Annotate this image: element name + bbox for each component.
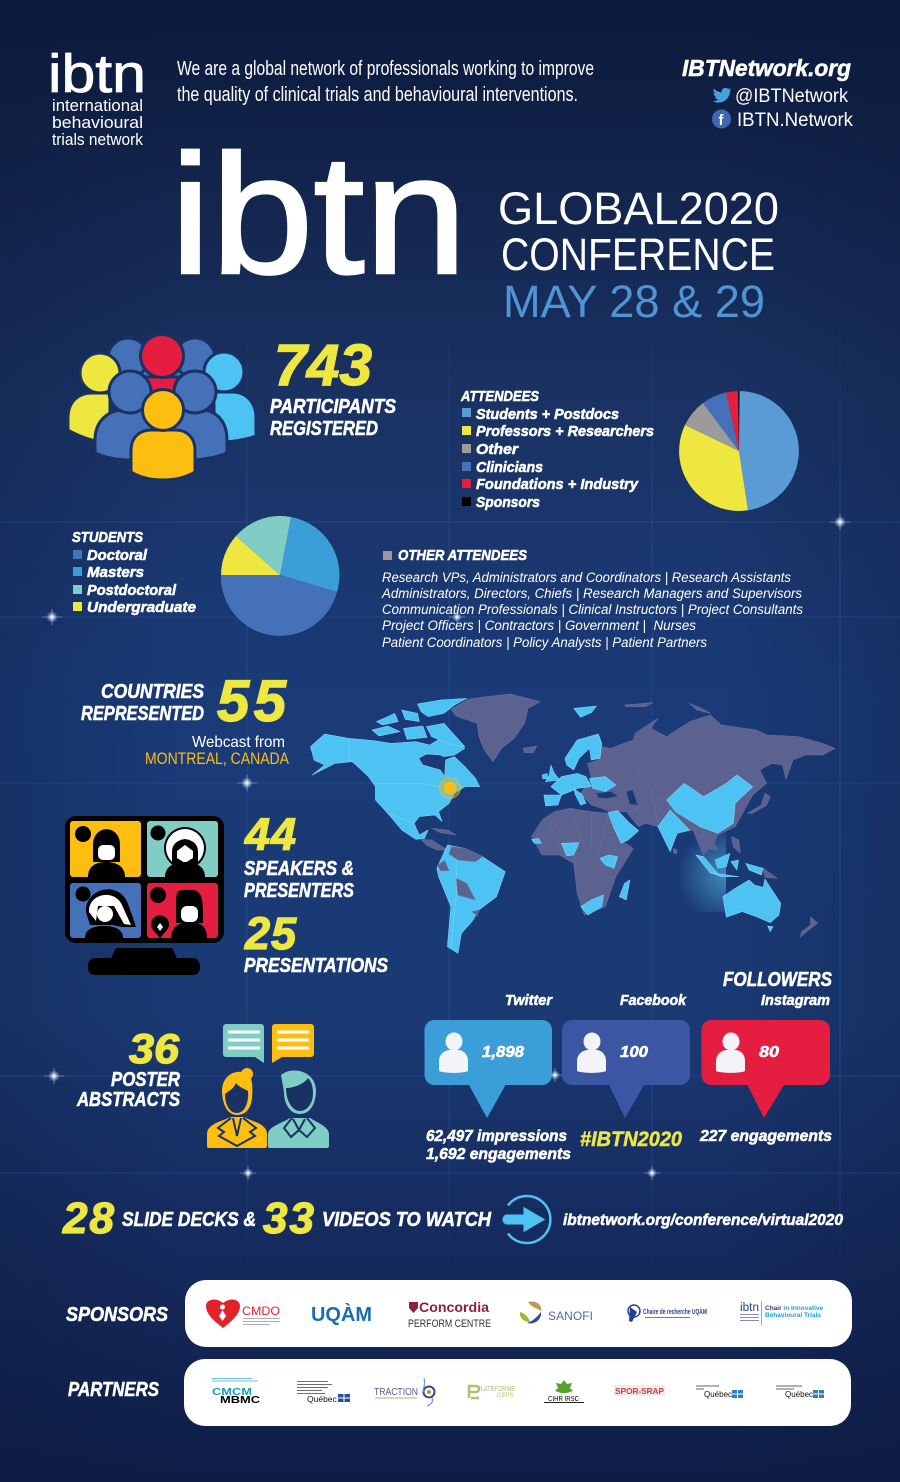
legend: attendees: Students + Postdocs <box>476 406 619 423</box>
heading: sponsors: SPONSORS <box>66 1304 169 1326</box>
legend: students: Postdoctoral <box>87 582 177 599</box>
panel: sponsors logos <box>185 1280 852 1347</box>
slide decks and videos: 28 <box>62 1194 115 1243</box>
engagement figures: #IBTN2020 <box>580 1128 682 1151</box>
slide decks and videos: VIDEOS TO WATCH <box>322 1209 492 1231</box>
large ibtn logo: ibtn <box>170 120 467 310</box>
logo: Centre integre Quebec: Québec <box>307 1394 338 1404</box>
social media followers <box>424 969 833 1163</box>
engagement figures: 227 engagements <box>699 1128 832 1145</box>
logo: Traction: TRACTION <box>374 1386 418 1398</box>
legend: attendees: ATTENDEES <box>460 388 539 405</box>
legend: students <box>72 529 196 616</box>
logo: Concordia: PERFORM CENTRE <box>408 1318 491 1330</box>
speakers and presentations stats: SPEAKERS & <box>244 858 354 880</box>
pie chart: students <box>221 516 339 636</box>
logo: CMDO <box>206 1299 280 1328</box>
slide decks and videos: 33 <box>263 1194 314 1243</box>
speakers and presentations stats: 25 <box>244 908 297 959</box>
twitter bubble: 1,898 <box>482 1044 524 1061</box>
web and social links: IBTNetwork.org <box>682 55 851 81</box>
logo: IBTN chair: ibtn <box>740 1302 759 1314</box>
legend: students: Undergraduate <box>87 599 196 616</box>
poster abstracts stat: ABSTRACTS <box>76 1089 181 1111</box>
logo: Centre integre Quebec <box>297 1382 350 1404</box>
logo: Fonds de recherche Quebec sante: Québec <box>704 1390 732 1399</box>
engagement figures <box>426 1128 832 1163</box>
speakers and presentations stats <box>244 809 389 977</box>
logo: Sanofi: SANOFI <box>548 1309 593 1323</box>
poster abstracts stat <box>76 1025 181 1111</box>
conference title: MAY 28 & 29 <box>503 276 765 327</box>
logo: CMCM MBMC: MBMC <box>220 1394 260 1406</box>
logo: Traction <box>374 1378 434 1406</box>
tagline: the quality of clinical trials and behavioural interventions. <box>177 84 578 106</box>
legend: students: Doctoral <box>87 547 148 564</box>
facebook bubble <box>562 993 690 1118</box>
logo: Chaire UQAM <box>628 1305 707 1322</box>
conference title: CONFERENCE <box>501 229 775 280</box>
facebook bubble: Facebook <box>620 993 687 1009</box>
legend: attendees: Clinicians <box>476 459 543 476</box>
logo: Chaire UQAM: Chaire de recherche UQÀM <box>643 1307 707 1316</box>
icon: speech bubbles and two people <box>207 1024 329 1148</box>
heading: partners: PARTNERS <box>68 1379 160 1401</box>
twitter bubble: Twitter <box>505 993 553 1009</box>
slide decks and videos <box>62 1194 843 1243</box>
countries stat: MONTREAL, CANADA <box>145 750 289 768</box>
panel: partners logos <box>184 1359 851 1426</box>
logo: CIHR IRSC: CIHR IRSC <box>548 1394 579 1403</box>
countries stat: REPRESENTED <box>81 703 204 725</box>
logo: Fonds de recherche Quebec societe <box>776 1386 824 1399</box>
logo: CMCM MBMC: CMCM <box>212 1386 252 1398</box>
speakers and presentations stats: PRESENTATIONS <box>244 955 389 977</box>
other attendees text block: Research VPs, Administrators and Coordinators | Research Assistants <box>382 570 791 585</box>
countries stat: 55 <box>217 669 287 734</box>
poster abstracts stat: POSTER <box>111 1069 180 1091</box>
conference title: GLOBAL2020 <box>498 183 779 234</box>
header logo: ibtn international behavioural trials network: ibtn <box>48 44 146 104</box>
countries stat <box>81 669 289 768</box>
participants stat: PARTICIPANTS <box>270 396 397 418</box>
legend: attendees: Foundations + Industry <box>476 476 639 493</box>
legend: attendees <box>460 388 654 511</box>
countries stat: Webcast from <box>192 734 285 751</box>
icon: monitor with video call <box>67 818 222 975</box>
other attendees text block <box>381 547 803 650</box>
legend: attendees: Other <box>476 441 519 458</box>
logo: Sanofi <box>520 1302 593 1323</box>
icon: group of people <box>68 334 256 480</box>
web and social links <box>682 55 853 131</box>
other attendees text block: Patient Coordinators | Policy Analysts | Patient Partners <box>382 635 707 650</box>
instagram bubble: Instagram <box>761 993 830 1009</box>
header logo: ibtn international behavioural trials network: behavioural <box>52 113 143 132</box>
header logo: ibtn international behavioural trials network <box>48 44 146 149</box>
logo: CMDO: CMDO <box>242 1306 280 1318</box>
logo: Plateforme CEPS: CEPS <box>497 1393 513 1399</box>
world map <box>311 694 835 953</box>
icon: facebook <box>712 110 731 129</box>
legend: students: STUDENTS <box>72 529 143 546</box>
header logo: ibtn international behavioural trials network: international <box>52 96 143 115</box>
tagline <box>177 58 594 106</box>
logo: CIHR IRSC <box>544 1380 584 1403</box>
web and social links: IBTN.Network <box>737 110 853 131</box>
logo: SPOR SRAP: SPOR-SRAP <box>615 1386 664 1396</box>
logo: CMCM MBMC <box>212 1378 260 1406</box>
facebook bubble: 100 <box>620 1044 648 1061</box>
legend: students: Masters <box>87 564 144 581</box>
other attendees text block: OTHER ATTENDEES <box>398 547 527 564</box>
legend: attendees: Sponsors <box>476 494 540 511</box>
participants stat: 743 <box>274 333 372 398</box>
countries stat: COUNTRIES <box>101 681 205 703</box>
engagement figures: 62,497 impressions <box>426 1128 567 1145</box>
icon: Montreal marker <box>440 778 460 798</box>
logo: IBTN chair: Chair in Innovative <box>765 1305 824 1312</box>
logo: Concordia: Concordia <box>419 1299 489 1315</box>
other attendees text block: Project Officers | Contractors | Government | Nurses <box>382 618 696 633</box>
speakers and presentations stats: 44 <box>244 809 296 860</box>
logo: UQAM: UQÀM <box>311 1303 372 1326</box>
logo: IBTN chair <box>740 1301 824 1325</box>
participants stat: REGISTERED <box>270 418 378 440</box>
web and social links: @IBTNetwork <box>735 86 848 107</box>
logo: Plateforme CEPS <box>469 1386 515 1399</box>
other attendees text block: Administrators, Directors, Chiefs | Research Managers and Supervisors <box>381 586 802 601</box>
speakers and presentations stats: PRESENTERS <box>244 880 355 902</box>
icon: twitter bird <box>713 88 732 103</box>
logo: Fonds de recherche Quebec societe: Québec <box>785 1390 813 1399</box>
engagement figures: 1,692 engagements <box>426 1146 571 1163</box>
instagram bubble <box>702 993 830 1118</box>
other attendees text block: Communication Professionals | Clinical Instructors | Project Consultants <box>382 602 803 617</box>
heading: followers: FOLLOWERS <box>723 969 833 991</box>
icon: arrow in circle <box>502 1196 550 1243</box>
logo: IBTN chair: Behavioural Trials <box>765 1312 821 1319</box>
participants stat <box>270 333 397 440</box>
instagram bubble: 80 <box>759 1044 779 1061</box>
icon: facebook: f <box>718 112 724 129</box>
tagline: We are a global network of professionals working to improve <box>177 58 594 80</box>
slide decks and videos: SLIDE DECKS & <box>122 1209 256 1231</box>
header logo: ibtn international behavioural trials network: trials network <box>52 130 143 149</box>
conference title <box>498 183 779 327</box>
logo: Plateforme CEPS: PLATEFORME <box>477 1386 515 1393</box>
poster abstracts stat: 36 <box>129 1025 180 1072</box>
logo: Fonds de recherche Quebec sante <box>696 1386 743 1399</box>
legend: attendees: Professors + Researchers <box>476 423 654 440</box>
slide decks and videos: ibtnetwork.org/conference/virtual2020 <box>563 1212 843 1229</box>
pie chart: attendees <box>679 391 799 511</box>
twitter bubble <box>424 993 553 1118</box>
logo: Concordia <box>408 1299 491 1330</box>
